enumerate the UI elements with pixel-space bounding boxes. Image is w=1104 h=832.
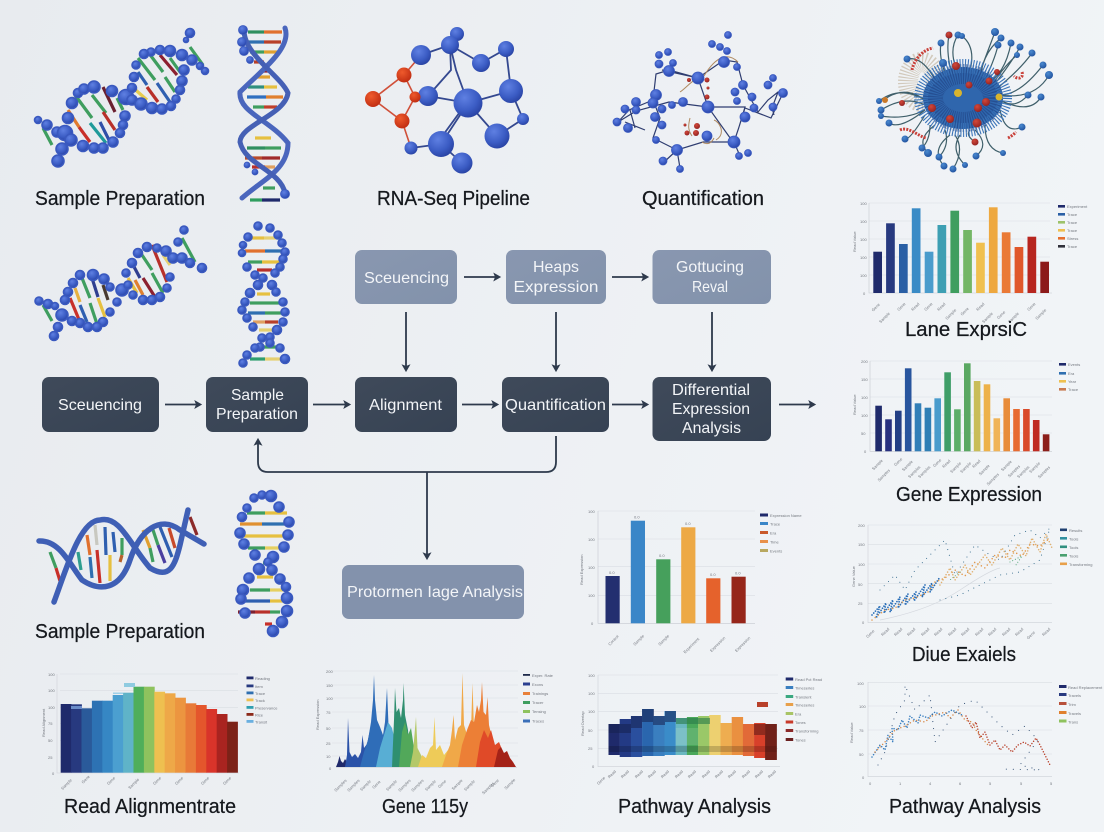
bar chart: read alignment rate: Trace [255,691,266,696]
bar chart: six bars centre: Trace [770,522,781,526]
scatter plot: pathway analysis: Travels [1068,693,1081,698]
stacked heat chart: pathway analysis: Read [607,769,617,779]
stacked heat chart: pathway analysis: Read [727,769,737,779]
icon: ball-and-stick DNA, lower middle [235,490,294,636]
bar chart: lane expression: Trace [1067,228,1078,233]
arrow: sample preparation to alignment [313,404,349,406]
stacked heat chart: pathway analysis: 100 [588,709,595,714]
stacked heat chart: pathway analysis: Transient [795,694,812,700]
scatter plot: diue exaiels: 200 [858,523,865,528]
bar chart: gene expression: Sample [1000,459,1013,472]
scatter plot: pathway analysis: 100 [857,681,864,686]
scatter plot: pathway analysis: 0 [862,775,865,780]
stacked heat chart: pathway analysis: Timeseries [795,686,814,690]
area chart: gene spikes: Exons [532,682,543,687]
area chart: gene spikes: Sample [424,778,437,792]
bar chart: six bars centre: 0.0 [735,570,741,576]
area chart: gene spikes: Gene [437,778,448,789]
arrow: sequencing to heaps [464,276,499,278]
box: sequencing dark [42,377,159,432]
scatter plot: diue exaiels: Read [920,627,930,637]
bar chart: six bars centre: 100 [588,565,595,570]
bar chart: lane expression: Trace [1067,244,1078,249]
bar chart: gene expression: Sample [978,463,991,476]
stacked heat chart: pathway analysis: Read Pct Read [795,677,822,682]
stacked heat chart: pathway analysis: Read [741,769,751,779]
bar chart: read alignment rate: Sample [60,777,73,791]
area chart: gene spikes: Read Expression [315,700,320,730]
bar chart: lane expression: Gene [959,306,970,317]
scatter plot: pathway analysis: Read Value [849,722,854,743]
label: quantification: Quantification [642,188,764,210]
area chart: gene spikes: 200 [326,669,333,674]
bar chart: lane expression: Sample [944,307,958,321]
stacked heat chart: pathway analysis: Read [701,769,711,779]
bar chart: read alignment rate: Gene [106,775,117,786]
scatter plot: diue exaiels: Read [947,627,957,637]
area chart: gene spikes: 25 [326,741,331,746]
scatter plot: diue exaiels: Read [1014,627,1024,637]
scatter plot: pathway analysis: 5 [989,781,992,786]
area chart: gene spikes: Samples [481,781,495,795]
area chart: gene spikes: Sample [450,777,464,791]
scatter plot: pathway analysis: 75 [859,728,864,733]
bar chart: gene expression: Read [941,458,951,469]
scatter plot: pathway analysis: Travels [1068,711,1081,716]
label: lane expression: Lane ExprsiC [905,319,1027,341]
bar chart: lane expression: 100 [860,237,867,242]
bar chart: gene expression: Trace [1068,387,1079,392]
bar chart: six bars centre: Expression [734,635,751,653]
scatter plot: diue exaiels: Read [906,627,916,637]
stacked heat chart: pathway analysis: Read [660,769,670,779]
area chart: gene spikes: 150 [326,683,333,688]
arrow: heaps to gottucing [612,276,647,278]
icon: molecule network [365,27,529,174]
icon: ball-and-stick DNA, middle left [35,226,206,340]
box: protormen image analysis: Protormen Iage Analysis [347,584,523,601]
arrow: sequencing to sample preparation [165,404,200,406]
bar chart: gene expression: Samples [1016,464,1030,479]
arrow: quantification to differential expression [612,404,647,406]
area chart: gene spikes: Trainings [532,691,548,696]
scatter plot: diue exaiels: 25 [858,601,863,606]
scatter plot: pathway analysis: 6 [959,781,962,786]
bar chart: gene expression: Samples [985,472,1000,486]
bar chart: gene expression: Sample [1028,460,1042,474]
area chart: gene spikes: Sample [463,778,476,792]
bar chart: six bars centre: Sample [632,633,646,647]
bar chart: lane expression: Gene [923,301,934,312]
arrow: down to proteomics box [426,472,428,558]
icon: quantification molecule [613,32,788,172]
bar chart: lane expression: Sample [981,310,994,324]
label: gene 115y: Gene 115y [382,796,468,818]
scatter plot: pathway analysis: 50 [859,752,864,757]
bar chart: read alignment rate: Sample [127,776,141,790]
arrow: alignment to quantification [462,404,497,406]
bar chart: six bars centre: 0.0 [659,553,665,558]
area chart: gene spikes: Tracer [532,700,544,705]
scatter plot: diue exaiels: Read [974,627,984,637]
stacked heat chart: pathway analysis: 0 [592,764,595,769]
bar chart: read alignment rate: 100 [48,672,55,677]
arrow: differential expression output [779,404,814,406]
scatter plot: diue exaiels: 150 [858,542,865,547]
bar chart: read alignment rate: Transit [255,720,268,724]
stacked heat chart: pathway analysis: Timeseries [795,702,814,708]
stacked heat chart: pathway analysis: Transforming [795,728,818,734]
stacked heat chart: pathway analysis: Read [647,769,657,779]
scatter plot: diue exaiels: Tools [1069,536,1078,542]
bar chart: gene expression: Read [971,458,981,469]
bar chart: read alignment rate: Gene [80,774,91,785]
bar chart: read alignment rate: Gene [200,775,211,786]
bar chart: lane expression: Sample [1034,307,1048,321]
bar chart: lane expression: 100 [860,255,867,260]
stacked heat chart: pathway analysis: 50 [588,728,593,733]
bar chart: lane expression: Sample [1007,310,1020,324]
bar chart: six bars centre: 0.0 [710,572,716,577]
box: heaps expression [506,250,606,304]
stacked heat chart: pathway analysis: Tones [795,720,806,725]
bar chart: six bars centre: 0.0 [609,570,615,575]
scatter plot: diue exaiels: Gene Value [851,565,856,587]
label: diue exaiels: Diue Exaiels [912,644,1016,666]
scatter plot: diue exaiels: Tools [1069,554,1078,558]
label: read alignment rate: Read Alignmentrate [64,796,236,818]
bar chart: six bars centre: Experiment [682,636,701,654]
arrow: gottucing down to differential expression [711,312,713,370]
stacked heat chart: pathway analysis: Gene [596,775,607,786]
bar chart: lane expression: Read Value [852,231,857,252]
bar chart: lane expression: Gene [870,301,881,312]
scatter plot: pathway analysis [849,681,1103,786]
bar chart: six bars centre: 0.0 [634,514,640,520]
stacked heat chart: pathway analysis: Read Overlap [580,711,585,736]
stacked heat chart: pathway analysis: Read [687,769,697,779]
bar chart: read alignment rate: 0 [52,771,55,776]
scatter plot: pathway analysis: 5 [1020,781,1023,786]
bar chart: six bars centre: Events [770,548,782,554]
bar chart: six bars centre: Read Expression [579,555,584,585]
box: alignment: Alignment [369,397,443,414]
area chart: gene spikes: 50 [326,726,331,731]
box: differential expression analysis: Analysis [682,420,741,437]
area chart: gene spikes: Gene [489,777,500,788]
box: protormen image analysis [342,565,524,619]
scatter plot: diue exaiels: 100 [858,562,865,567]
bar chart: six bars centre: Time [770,540,780,544]
box: heaps expression: Heaps [533,259,579,276]
scatter plot: pathway analysis: Trans [1068,720,1078,724]
icon: ribbon DNA, lower left [39,510,204,602]
area chart: gene spikes: Samples [333,778,348,793]
bar chart: lane expression: Sample [878,310,891,324]
bar chart: gene expression: 100 [861,413,868,418]
scatter plot: pathway analysis: 100 [859,704,866,709]
bar chart: gene expression: Samples [1007,464,1021,478]
bar chart: gene expression: Year [1068,379,1077,384]
bar chart: read alignment rate: Rice [255,712,264,718]
bar chart: lane expression: Trace [1067,220,1078,225]
scatter plot: pathway analysis: Trim [1068,702,1077,707]
label: pathway analysis right: Pathway Analysis [889,796,1041,818]
scatter plot: diue exaiels: Read [960,627,970,637]
icon: protein interaction network [876,28,1053,172]
area chart: gene spikes: Samples [397,778,412,793]
bar chart: gene expression: 150 [861,377,868,382]
label: pathway analysis left: Pathway Analysis [618,796,771,818]
scatter plot: pathway analysis: 0 [869,781,872,786]
scatter plot: diue exaiels: Transforming [1069,562,1092,567]
bar chart: six bars centre: 0.0 [685,521,691,526]
box: sample preparation [206,377,308,432]
label: gene expression: Gene Expression [896,484,1042,506]
bar chart: read alignment rate: Preservance [255,706,278,710]
bar chart: lane expression: Gene [996,309,1007,320]
arrow: heaps down to quantification [555,312,557,370]
stacked heat chart: pathway analysis [580,673,822,786]
bar chart: lane expression: 0 [863,291,866,296]
bar chart: gene expression: Gene [932,457,943,468]
stacked heat chart: pathway analysis: 100 [588,673,595,678]
box: sequencing dark: Sceuencing [58,397,142,414]
bar chart: gene expression: Samples [876,468,891,482]
area chart: gene spikes: Samples [346,778,361,793]
scatter plot: diue exaiels: Gene [1026,629,1037,640]
box: alignment [355,377,457,432]
area chart: gene spikes: 100 [326,696,333,701]
box: sequencing light: Sceuencing [364,270,449,287]
bar chart: lane expression: Gene [1026,301,1037,312]
scatter plot: diue exaiels: Read [880,627,890,637]
bar chart: read alignment rate: Item [255,684,263,689]
box: gottucing reval: Gottucing [676,259,744,276]
bar chart: six bars centre: 100 [588,537,595,542]
box: heaps expression: Expression [514,279,598,296]
area chart: gene spikes: Sample [359,778,372,792]
box: sample preparation: Preparation [216,406,298,423]
arrow: feedback loop to sample preparation [258,436,556,472]
stacked heat chart: pathway analysis: Read [620,769,630,779]
box: differential expression analysis: Expression [672,401,750,418]
bar chart: gene expression: Sample [871,458,884,471]
arrow: sequencing down to alignment [405,312,407,370]
bar chart: read alignment rate: 25 [48,755,53,760]
bar chart: six bars centre: Expression Name [770,513,802,518]
box: gottucing reval: Reval [692,279,728,296]
bar chart: gene expression: Gene [893,456,904,467]
scatter plot: diue exaiels: Read [987,627,997,637]
box: gottucing reval [652,250,771,304]
stacked heat chart: pathway analysis: Read [674,769,684,779]
bar chart: read alignment rate: Read Alignment [41,708,46,737]
stacked heat chart: pathway analysis: Read [714,769,724,779]
bar chart: gene expression: Samples [1037,465,1051,479]
icon: ball-and-stick DNA, top left [34,28,208,167]
bar chart: read alignment rate: 50 [48,738,53,743]
area chart: gene spikes [315,669,554,795]
area chart: gene spikes: Traces [532,718,544,724]
box: quantification [502,377,609,432]
area chart: gene spikes: Sample [385,778,398,792]
stacked heat chart: pathway analysis: 25 [588,746,593,751]
bar chart: read alignment rate: Gene [222,775,233,786]
scatter plot: diue exaiels: Read [1041,627,1051,637]
bar chart: gene expression: 0 [864,449,867,454]
bar chart: gene expression: Events [1068,362,1080,367]
area chart: gene spikes: Gene [371,779,382,790]
label: sample preparation top: Sample Preparation [35,188,205,210]
bar chart: gene expression: Read Value [852,394,857,415]
bar chart: lane expression: Trace [1067,212,1078,217]
bar chart: read alignment rate: Gene [152,775,163,786]
area chart: gene spikes: 75 [326,710,331,715]
box: sample preparation: Sample [231,387,284,404]
scatter plot: diue exaiels: Read [893,627,903,637]
bar chart: lane expression [852,201,1088,324]
bar chart: lane expression: 100 [860,201,867,206]
area chart: gene spikes: 10 [326,754,331,759]
bar chart: six bars centre: 100 [588,593,595,598]
scatter plot: pathway analysis: Read Replacement [1068,685,1103,690]
scatter plot: diue exaiels: 0 [862,620,865,625]
bar chart: gene expression [852,359,1080,486]
stacked heat chart: pathway analysis: Era [795,712,802,716]
bar chart: lane expression: Gene [896,301,907,312]
bar chart: six bars centre: 0 [591,621,594,626]
bar chart: gene expression: Sample [949,460,963,474]
box: differential expression analysis: Differential [672,382,750,399]
bar chart: lane expression: Stress [1067,236,1078,241]
label: RNA-Seq pipeline: RNA-Seq Pipeline [377,188,530,210]
bar chart: six bars centre: Sample [657,633,671,647]
bar chart: read alignment rate: Gene [174,775,185,786]
bar chart: gene expression: 100 [861,395,868,400]
bar chart: lane expression: Experiment [1067,204,1088,209]
area chart: gene spikes: Exper. Rate [532,673,554,678]
bar chart: lane expression: Read [936,301,946,312]
stacked heat chart: pathway analysis: Tones [795,738,806,742]
bar chart: six bars centre: Control [607,634,620,647]
bar chart: read alignment rate [41,672,278,791]
scatter plot: diue exaiels: Tools [1069,545,1078,550]
bar chart: read alignment rate: Reading [255,676,270,681]
bar chart: six bars centre: Expression [709,635,726,653]
stacked heat chart: pathway analysis: Read [754,769,764,779]
bar chart: gene expression: 50 [861,431,866,436]
bar chart: read alignment rate: Track [255,698,265,703]
bar chart: lane expression: Read [975,301,985,312]
bar chart: lane expression: 100 [860,219,867,224]
scatter plot: pathway analysis: 1 [899,781,902,786]
bar chart: gene expression: 200 [861,359,868,364]
scatter plot: diue exaiels: Read [933,627,943,637]
area chart: gene spikes: Samples [410,778,425,793]
bar chart: six bars centre: 100 [588,509,595,514]
scatter plot: diue exaiels: 50 [858,582,863,587]
icon: ball-and-stick DNA vertical, middle [238,222,290,367]
box: quantification: Quantification [505,397,606,414]
label: sample preparation lower: Sample Preparation [35,621,205,643]
stacked heat chart: pathway analysis: Read [767,769,777,779]
stacked heat chart: pathway analysis: Read [634,769,644,779]
bar chart: gene expression: Sample [901,459,914,472]
bar chart: gene expression: Era [1068,371,1075,376]
bar chart: read alignment rate: 75 [48,721,53,726]
area chart: gene spikes: 0 [329,766,332,771]
stacked heat chart: pathway analysis: 100 [588,691,595,696]
scatter plot: pathway analysis: 4 [929,781,932,786]
bar chart: gene expression: Sample [959,460,973,474]
scatter plot: diue exaiels [851,523,1092,640]
bar chart: read alignment rate: 100 [48,705,55,710]
bar chart: six bars centre: Era [770,530,777,536]
bar chart: read alignment rate: 100 [48,688,55,693]
bar chart: gene expression: Samples [907,464,921,479]
scatter plot: diue exaiels: Results [1069,528,1082,533]
scatter plot: pathway analysis: 5 [1050,781,1053,786]
box: sequencing light [355,250,457,304]
area chart: gene spikes: Sample [503,777,517,790]
box: differential expression analysis [652,377,771,441]
bar chart: gene expression: Samples [917,464,931,479]
scatter plot: diue exaiels: Read [1001,627,1011,637]
bar chart: lane expression: Read [910,301,920,312]
area chart: gene spikes: Tensing [532,709,546,714]
scatter plot: diue exaiels: Gene [865,628,876,639]
bar chart: lane expression: 100 [860,273,867,278]
bar chart: six bars centre [579,509,802,654]
icon: ribbon DNA, top centre-left [238,26,290,200]
